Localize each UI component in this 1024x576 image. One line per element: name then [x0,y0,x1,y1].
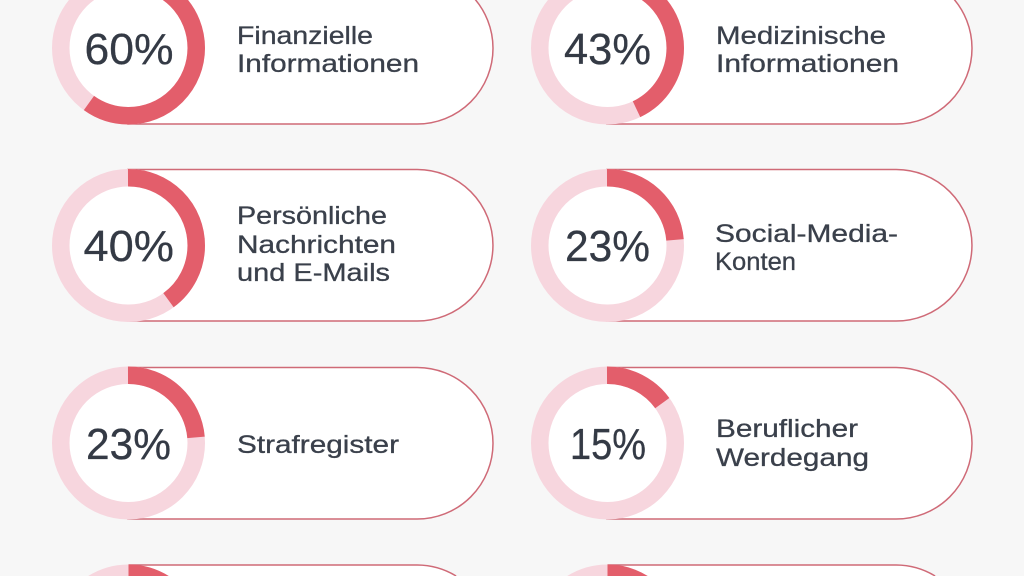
panel: cropped bottom right card [567,564,935,576]
panel: Medizinische Informationen 43% [538,0,972,124]
value 40%: 40% [84,222,174,271]
pill outline [128,565,456,576]
donut chart 60% [58,0,198,118]
panel: Beruflicher Werdegang 15% [538,368,972,519]
pill fill [128,565,456,576]
pill outline [128,368,493,519]
value 43%: 43% [564,25,651,74]
label: Social-Media- [715,220,898,248]
label: Konten [715,248,796,276]
panel: Strafregister 23% [58,368,493,519]
panel: Persönliche Nachrichten und E-Mails 40% [58,170,493,321]
pill outline [128,0,493,124]
value 23%: 23% [565,222,650,271]
label: Informationen [237,50,419,78]
donut ring cropped [88,564,128,576]
donut value cropped [128,564,169,576]
panel: Finanzielle Informationen 60% [58,0,493,124]
panel: Social-Media-Konten 23% [538,170,972,321]
pill outline [128,170,493,321]
pill outline [607,170,972,321]
donut chart 43% [538,0,678,118]
label: Medizinische [716,22,886,50]
pill fill [608,565,935,576]
label: Persönliche [237,202,387,230]
label: Informationen [716,50,899,78]
pill outline [607,0,972,124]
label: Finanzielle [237,22,373,50]
donut ring cropped [567,564,608,576]
donut chart 15% [538,373,678,513]
label: Nachrichten [237,231,396,259]
panel: cropped bottom left card [88,564,456,576]
donut chart 23% [58,373,198,513]
label: Beruflicher [716,415,858,443]
donut chart 40% [58,176,198,316]
label: Werdegang [716,444,869,472]
value 15%: 15% [570,420,646,469]
pill outline [607,368,972,519]
value 60%: 60% [84,25,174,74]
value 23%: 23% [86,420,171,469]
pill outline [608,565,935,576]
label: und E-Mails [237,259,390,287]
label: Strafregister [237,431,399,459]
donut value cropped [608,564,648,576]
donut chart 23% [538,176,678,316]
